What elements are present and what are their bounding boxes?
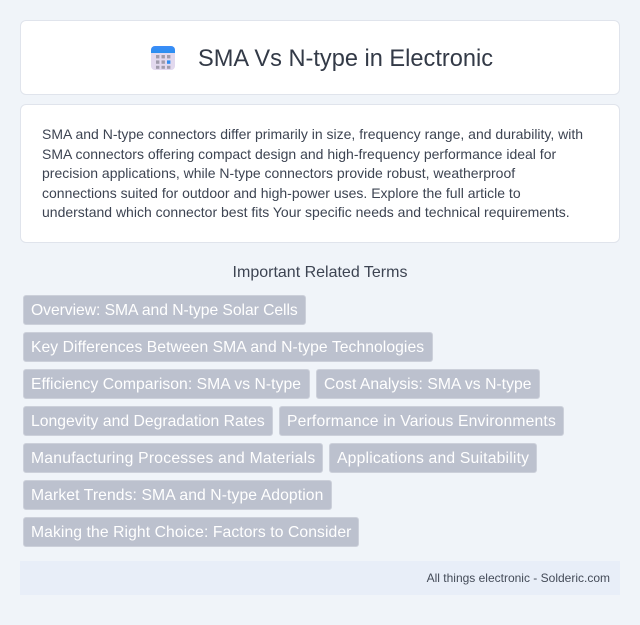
tag: making the right choice: Making the Right Choice: Factors to Consider xyxy=(31,524,351,541)
tag: efficiency xyxy=(23,369,310,399)
heading: important related terms: Important Related Terms xyxy=(233,264,407,281)
tag: manufacturing: Manufacturing Processes and Materials xyxy=(31,450,315,467)
icon: calendar xyxy=(151,46,175,70)
summary text: SMA connectors offering compact design and high-frequency performance ideal for xyxy=(42,146,556,162)
tag: cost: Cost Analysis: SMA vs N-type xyxy=(324,376,531,393)
summary text: understand which connector best fits Your specific needs and technical requirements. xyxy=(42,204,570,220)
summary text: connections suited for outdoor and high-power uses. Explore the full article to xyxy=(42,185,521,201)
tag: key differences xyxy=(23,332,433,362)
title: SMA Vs N-type in Electronic xyxy=(198,46,493,72)
tag: market trends xyxy=(23,480,332,510)
tag: making the right choice xyxy=(23,517,359,547)
summary text: precision applications, while N-type connectors provide robust, weatherproof xyxy=(42,165,515,181)
tag: efficiency: Efficiency Comparison: SMA vs N-type xyxy=(31,376,301,393)
summary panel xyxy=(20,104,620,243)
tag: applications: Applications and Suitability xyxy=(337,450,529,467)
tag: performance xyxy=(279,406,564,436)
tag: longevity: Longevity and Degradation Rates xyxy=(31,413,265,430)
tag: key differences: Key Differences Between SMA and N-type Technologies xyxy=(31,339,424,356)
tag: longevity xyxy=(23,406,273,436)
tag: manufacturing xyxy=(23,443,323,473)
tag: market trends: Market Trends: SMA and N-type Adoption xyxy=(31,487,323,504)
tag: applications xyxy=(329,443,537,473)
tag: performance: Performance in Various Environments xyxy=(287,413,556,430)
tag list xyxy=(23,295,564,547)
title card xyxy=(20,20,620,95)
footer xyxy=(20,561,620,595)
footer text: All things electronic - Solderic.com xyxy=(427,571,610,585)
tag: overview xyxy=(23,295,306,325)
summary text xyxy=(42,126,583,220)
summary text: SMA and N-type connectors differ primarily in size, frequency range, and durability, with xyxy=(42,126,583,142)
tag: overview: Overview: SMA and N-type Solar Cells xyxy=(31,302,298,319)
tag: cost xyxy=(316,369,540,399)
